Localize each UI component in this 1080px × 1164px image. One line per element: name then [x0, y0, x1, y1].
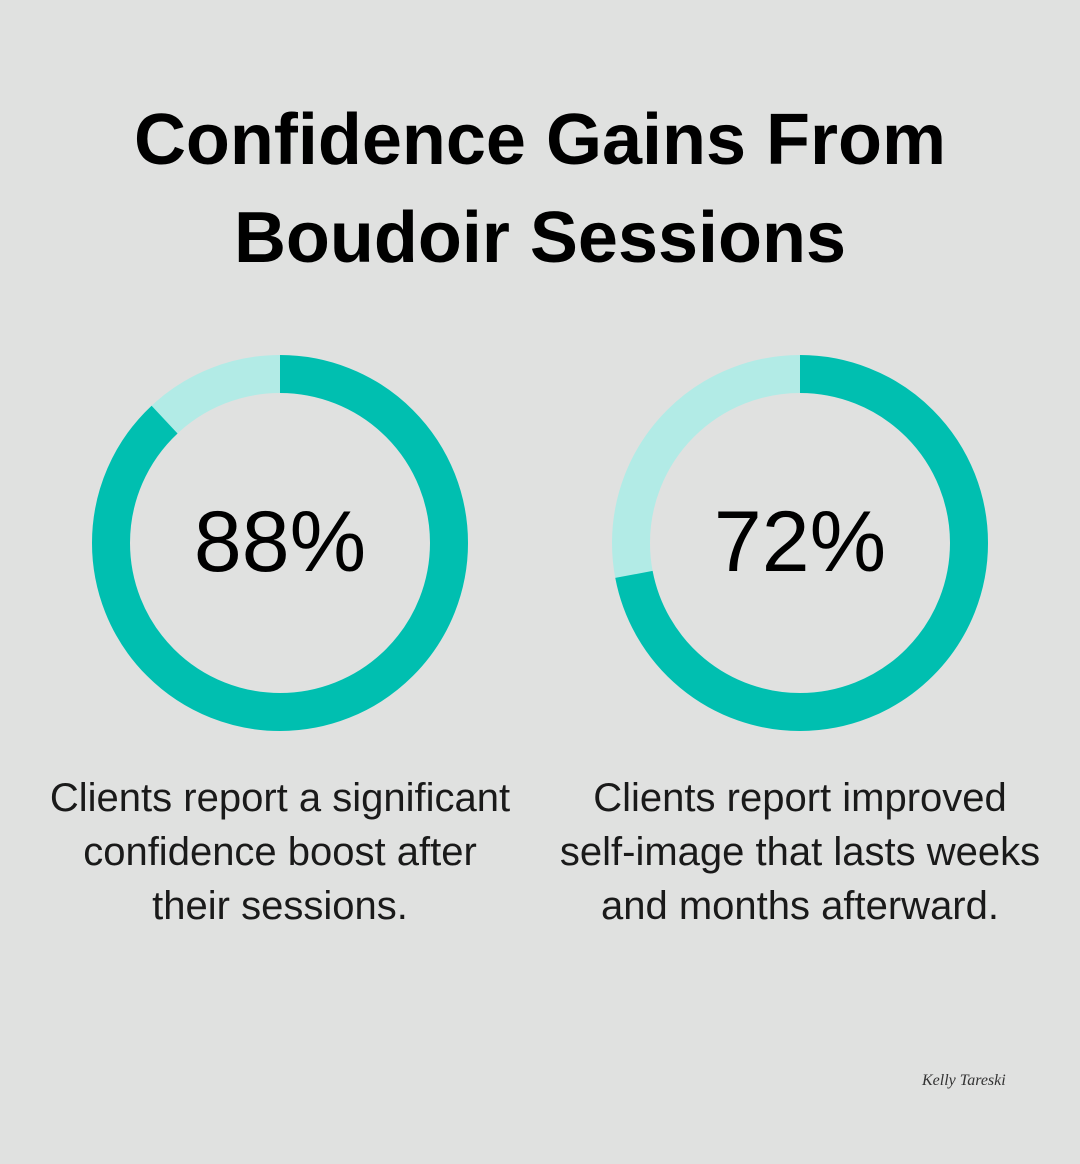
title	[134, 100, 946, 278]
title: Boudoir Sessions	[234, 198, 846, 278]
chart: donut 72%	[612, 355, 988, 731]
caption: 72%: Clients report improved	[593, 776, 1007, 820]
title: Confidence Gains From	[134, 100, 946, 180]
chart: donut 88%: 88%	[194, 494, 366, 590]
caption: 72%	[560, 776, 1040, 928]
logo: Kelly Tareski	[922, 1072, 1006, 1089]
caption: 88%: confidence boost after	[83, 830, 477, 874]
caption: 88%	[50, 776, 510, 928]
chart: donut 88%	[92, 355, 468, 731]
caption: 88%: Clients report a significant	[50, 776, 510, 820]
caption: 72%: self-image that lasts weeks	[560, 830, 1040, 874]
caption: 72%: and months afterward.	[601, 884, 999, 928]
chart: donut 72%: 72%	[714, 494, 886, 590]
caption: 88%: their sessions.	[152, 884, 408, 928]
